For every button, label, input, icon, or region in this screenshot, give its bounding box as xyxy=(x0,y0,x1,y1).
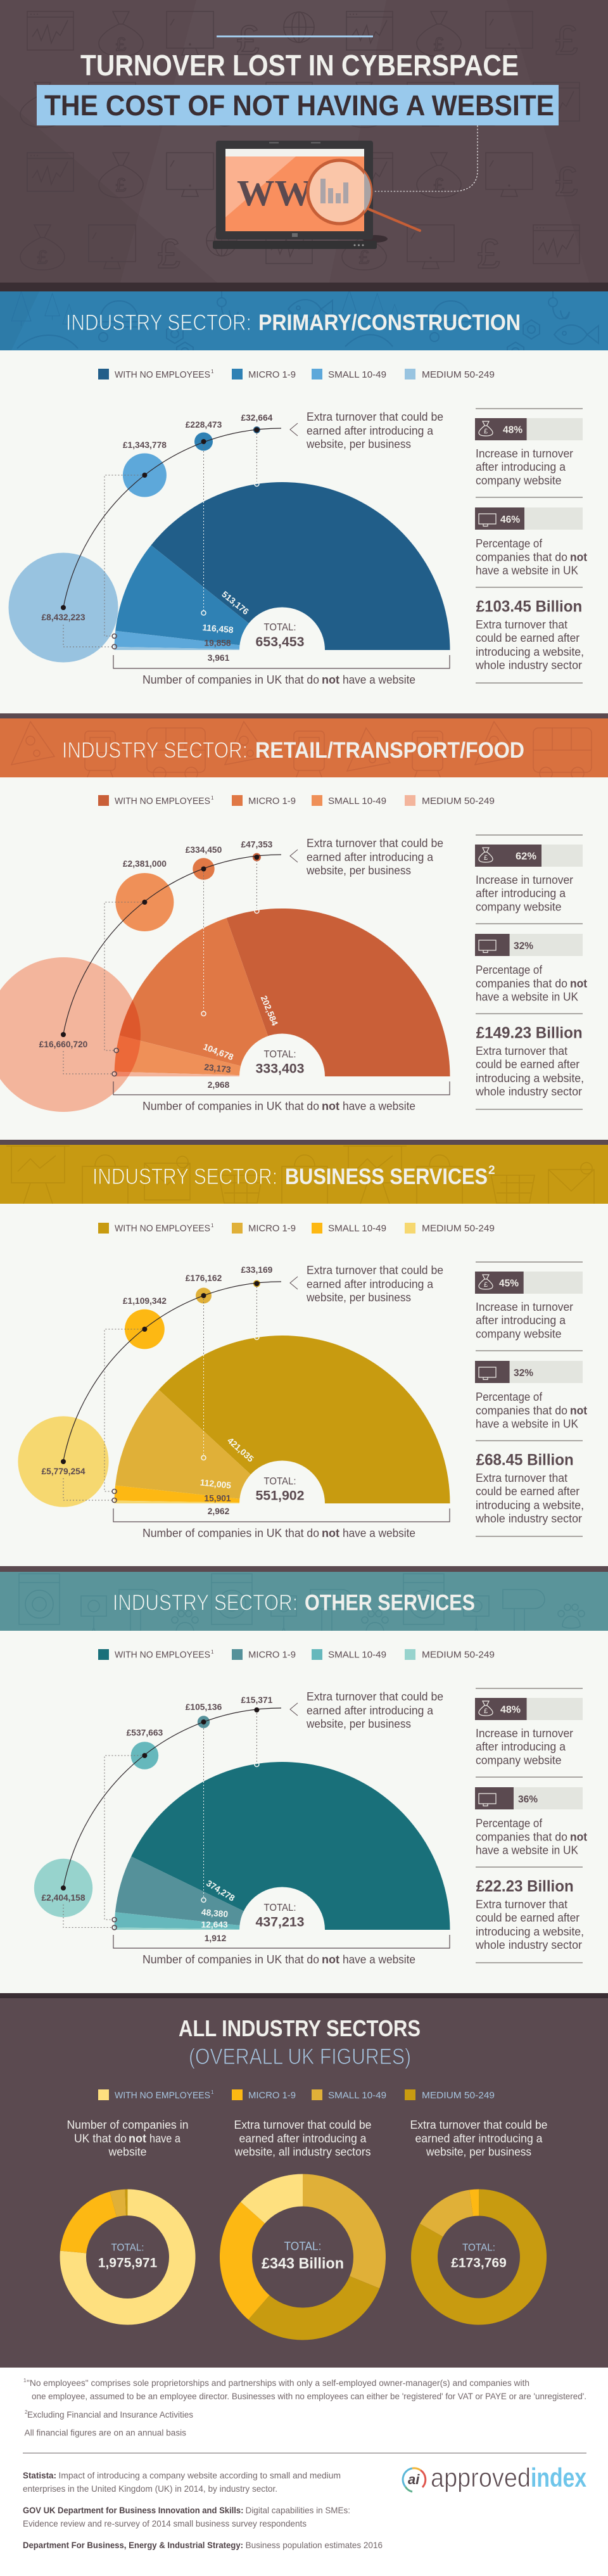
chart: turnover bubbles xyxy=(9,426,281,663)
column caption: companies: have a xyxy=(149,2133,181,2145)
panel: key statistics: Increase in turnover xyxy=(476,447,573,460)
icon: money bag xyxy=(479,1275,493,1289)
bracket and axis caption: Number of companies in UK that do xyxy=(142,1527,319,1540)
callout: extra turnover per business: earned after introducing a xyxy=(307,1704,434,1717)
dashed connector from banner to magnifier xyxy=(372,125,478,191)
logo: approvedindex xyxy=(403,2463,587,2492)
bubble value labels: £5,779,254 xyxy=(41,1467,86,1476)
bubble value labels: £32,664 xyxy=(241,413,273,423)
donut chart: per business turnover: TOTAL: xyxy=(462,2243,495,2253)
sector value labels: 421,035 xyxy=(225,1436,256,1464)
sources: Digital capabilities in SMEs: xyxy=(246,2505,350,2515)
panel: key statistics: £103.45 Billion xyxy=(476,598,582,616)
donut chart: companies xyxy=(60,2190,196,2325)
column caption: all sectors turnover: Extra turnover that could be xyxy=(234,2119,371,2131)
chart total: TOTAL: xyxy=(263,1476,296,1487)
sources: Statista: xyxy=(23,2470,56,2480)
bracket and axis caption: have a website xyxy=(343,1953,415,1966)
panel: key statistics: Increase in turnover xyxy=(476,874,573,886)
icon: money bag: £ xyxy=(484,1707,488,1715)
bubble value labels xyxy=(41,413,273,622)
panel: business services xyxy=(18,1223,587,1540)
hero panel: £ xyxy=(157,230,180,277)
sector value labels: 513,176 xyxy=(220,589,251,616)
panel: key statistics: Percentage of xyxy=(476,1817,543,1830)
chart total xyxy=(256,1476,304,1503)
bubble value labels: £2,381,000 xyxy=(123,859,167,869)
chart total xyxy=(256,1903,305,1930)
chart total: 437,213 xyxy=(256,1915,305,1930)
panel: key statistics: company website xyxy=(476,474,561,487)
bubble value labels: £15,371 xyxy=(241,1695,273,1705)
callout: extra turnover per business: website, per business xyxy=(306,1718,411,1730)
legend: 1 xyxy=(211,369,214,374)
icon: money bag: £ xyxy=(484,428,488,435)
sector value labels: 202,584 xyxy=(259,994,280,1027)
bracket and axis caption: Number of companies in UK that do xyxy=(142,1953,319,1966)
legend: SMALL 10-49 xyxy=(328,796,386,807)
column caption: per business turnover: Extra turnover that could be xyxy=(410,2119,547,2131)
chart: companies semicircle xyxy=(114,1762,450,1930)
panel: key statistics: companies that do xyxy=(476,1831,567,1844)
column caption: companies: Number of companies in xyxy=(67,2119,189,2131)
bubble value labels: £8,432,223 xyxy=(41,613,86,622)
icon: money bag xyxy=(479,1701,493,1716)
sector value labels: 15,901 xyxy=(204,1494,231,1503)
panel: key statistics: companies that do xyxy=(476,1405,567,1417)
chart total: 653,453 xyxy=(256,634,305,649)
callout: extra turnover per business: website, per business xyxy=(306,438,411,450)
sources: Business population estimates 2016 xyxy=(246,2540,383,2550)
title: TURNOVER LOST IN CYBERSPACE xyxy=(80,49,519,82)
callout: extra turnover per business: website, per business xyxy=(306,1291,411,1304)
sector value labels: 12,643 xyxy=(201,1920,228,1930)
panel: key statistics: introducing a website, xyxy=(476,646,584,658)
chart total: TOTAL: xyxy=(263,1903,296,1913)
legend: MICRO 1-9 xyxy=(248,796,296,807)
hero panel xyxy=(0,0,608,291)
panel: key statistics: Extra turnover that xyxy=(476,1045,567,1057)
panel: key statistics: Percentage of xyxy=(476,964,543,976)
column caption: all sectors turnover: website, all industry sectors xyxy=(234,2146,371,2158)
callout: extra turnover per business: earned after introducing a xyxy=(307,1278,434,1291)
panel: key statistics: could be earned after xyxy=(476,1485,580,1498)
bracket and axis caption xyxy=(113,655,450,686)
sector value labels: 1,912 xyxy=(205,1934,227,1943)
bubble value labels: £2,404,158 xyxy=(41,1893,86,1903)
bracket and axis caption xyxy=(113,1935,450,1966)
bubble value labels xyxy=(41,1695,273,1903)
icon: monitor xyxy=(479,514,496,526)
panel: key statistics: not xyxy=(570,551,587,564)
legend: WITH NO EMPLOYEES xyxy=(115,1650,210,1660)
panel: key statistics: not xyxy=(570,1831,587,1844)
sector value labels: 116,458 xyxy=(202,623,234,635)
donut chart: companies: 1,975,971 xyxy=(98,2255,158,2271)
icon: laptop with magnifier xyxy=(213,141,420,249)
sector value labels: 2,962 xyxy=(208,1507,230,1516)
bubble value labels xyxy=(39,840,273,1049)
panel: other services xyxy=(34,1649,587,1966)
column caption: per business turnover: website, per business xyxy=(426,2146,531,2158)
panel: key statistics: after introducing a xyxy=(476,1740,566,1753)
footnotes: Excluding Financial and Insurance Activities xyxy=(27,2409,193,2420)
column caption: all sectors turnover: earned after introducing a xyxy=(239,2133,367,2145)
column caption: companies: not xyxy=(129,2133,146,2145)
panel: key statistics xyxy=(475,409,587,683)
sources: Evidence review and re-survey of 2014 small business survey respondents xyxy=(23,2518,307,2528)
bracket and axis caption xyxy=(113,1081,450,1113)
panel: key statistics: Percentage of xyxy=(476,537,543,550)
donut chart: companies: TOTAL: xyxy=(111,2243,144,2253)
sector value labels xyxy=(202,994,280,1090)
legend: 1 xyxy=(211,1649,214,1655)
panel: key statistics: could be earned after xyxy=(476,1911,580,1924)
section header: retail/transport/food: INDUSTRY SECTOR: xyxy=(62,738,248,763)
panel: key statistics: 32% xyxy=(514,941,533,952)
icon: monitor xyxy=(479,1794,496,1806)
panel: key statistics: introducing a website, xyxy=(476,1072,584,1085)
accent rule above title xyxy=(217,35,373,37)
section header: other services: OTHER SERVICES xyxy=(305,1590,475,1616)
panel: key statistics: Extra turnover that xyxy=(476,1898,567,1911)
hero panel: £ xyxy=(477,87,500,134)
panel: key statistics xyxy=(475,1262,587,1536)
panel: retail/transport/food xyxy=(0,795,587,1113)
column caption: per business turnover xyxy=(410,2119,547,2158)
footnotes: one employee, assumed to be an employee director. Businesses with no employees can either be 'registered' for VAT or PAYE or are 'unregistered'. xyxy=(32,2391,586,2401)
footnotes: 1 xyxy=(23,2378,27,2383)
panel: key statistics: £22.23 Billion xyxy=(476,1878,574,1896)
callout: extra turnover per business: website, per business xyxy=(306,864,411,877)
donut chart: all sectors turnover: £343 Billion xyxy=(262,2255,344,2272)
panel: key statistics: companies that do xyxy=(476,551,567,564)
icon: monitor xyxy=(479,1367,496,1380)
sources xyxy=(23,2470,383,2550)
panel: primary/construction xyxy=(9,369,587,686)
heading: ALL INDUSTRY SECTORS xyxy=(179,2015,421,2041)
subtitle banner: THE COST OF NOT HAVING A WEBSITE xyxy=(44,89,554,122)
section header: retail/transport/food: RETAIL/TRANSPORT/FOOD xyxy=(255,738,524,763)
legend: MICRO 1-9 xyxy=(248,1223,296,1234)
hero panel: £ xyxy=(434,34,445,55)
sector value labels: 48,380 xyxy=(201,1908,229,1919)
callout: extra turnover per business: Extra turnover that could be xyxy=(307,837,443,850)
legend: SMALL 10-49 xyxy=(328,1223,386,1234)
legend: MEDIUM 50-249 xyxy=(422,796,495,807)
chart: companies semicircle xyxy=(114,1336,450,1503)
legend xyxy=(98,369,495,380)
panel: key statistics: after introducing a xyxy=(476,1314,566,1327)
hero panel: £ xyxy=(37,247,48,268)
panel: key statistics: companies that do xyxy=(476,978,567,990)
panel: key statistics: 46% xyxy=(500,514,520,525)
panel: key statistics: 32% xyxy=(514,1368,533,1379)
bubble value labels: £33,169 xyxy=(241,1265,273,1275)
section header: business services: 2 xyxy=(488,1164,495,1177)
sector value labels xyxy=(202,589,251,663)
callout: extra turnover per business: earned after introducing a xyxy=(307,424,434,437)
icon: money bag: £ xyxy=(484,854,488,862)
hero panel: £ xyxy=(434,175,445,196)
bubble value labels: £176,162 xyxy=(186,1273,222,1283)
callout: extra turnover per business xyxy=(290,837,443,877)
bracket and axis caption: not xyxy=(322,1953,339,1966)
section header: business services: BUSINESS SERVICES xyxy=(285,1164,488,1189)
chart total xyxy=(256,622,305,649)
chart: companies semicircle xyxy=(114,909,450,1076)
column caption: per business turnover: earned after introducing a xyxy=(415,2133,543,2145)
callout: extra turnover per business xyxy=(290,411,443,450)
chart: turnover bubbles xyxy=(0,853,281,1112)
panel: key statistics: not xyxy=(570,978,587,990)
section header: other services xyxy=(0,1566,608,1653)
legend: SMALL 10-49 xyxy=(328,1650,386,1660)
legend: MICRO 1-9 xyxy=(248,369,296,380)
bracket and axis caption: Number of companies in UK that do xyxy=(142,1100,319,1113)
section header: primary/construction xyxy=(0,290,608,361)
donut chart: per business turnover xyxy=(411,2189,547,2325)
sector value labels: 104,678 xyxy=(202,1042,235,1062)
legend: MICRO 1-9 xyxy=(248,1650,296,1660)
section header: retail/transport/food xyxy=(0,713,608,793)
sector value labels: 3,961 xyxy=(208,653,230,663)
legend: MEDIUM 50-249 xyxy=(422,2090,495,2101)
legend: MEDIUM 50-249 xyxy=(422,1223,495,1234)
bracket and axis caption xyxy=(113,1508,450,1540)
sources: Impact of introducing a company website according to small and medium xyxy=(58,2470,341,2480)
sector value labels: 19,858 xyxy=(204,639,231,647)
section header: primary/construction: INDUSTRY SECTOR: xyxy=(66,310,251,335)
callout: extra turnover per business: earned after introducing a xyxy=(307,851,434,864)
panel: key statistics: whole industry sector xyxy=(475,1939,582,1951)
panel: key statistics: whole industry sector xyxy=(475,1085,582,1098)
panel: key statistics: not xyxy=(570,1405,587,1417)
hero panel: £ xyxy=(359,247,370,268)
panel: key statistics: Increase in turnover xyxy=(476,1727,573,1740)
panel: key statistics: after introducing a xyxy=(476,887,566,900)
legend: WITH NO EMPLOYEES xyxy=(115,369,210,380)
bubble value labels: £334,450 xyxy=(186,845,222,855)
panel: key statistics: 48% xyxy=(503,424,522,436)
panel: all industry sectors xyxy=(0,1993,608,2368)
bubble value labels: £105,136 xyxy=(186,1702,222,1712)
panel: key statistics: 48% xyxy=(500,1704,521,1716)
legend: SMALL 10-49 xyxy=(328,369,386,380)
bubble value labels: £537,663 xyxy=(127,1728,163,1737)
donut chart: per business turnover: £173,769 xyxy=(451,2255,507,2271)
panel: key statistics: have a website in UK xyxy=(476,991,578,1004)
chart: turnover bubbles xyxy=(18,1280,281,1507)
sector value labels xyxy=(201,1878,237,1943)
legend: MEDIUM 50-249 xyxy=(422,1650,495,1660)
bracket and axis caption: have a website xyxy=(343,1100,415,1113)
panel: key statistics: Percentage of xyxy=(476,1391,543,1403)
bubble value labels: £47,353 xyxy=(241,840,273,849)
sector value labels: 23,173 xyxy=(204,1062,232,1074)
section header: business services: INDUSTRY SECTOR: xyxy=(92,1164,277,1189)
icon: money bag xyxy=(479,848,493,862)
panel: key statistics: have a website in UK xyxy=(476,1418,578,1431)
legend: WITH NO EMPLOYEES xyxy=(115,2090,210,2101)
chart total: TOTAL: xyxy=(263,622,296,633)
chart: turnover bubbles xyxy=(34,1707,281,1930)
panel: key statistics: after introducing a xyxy=(476,461,566,473)
bubble value labels: £228,473 xyxy=(186,420,222,430)
panel: key statistics: whole industry sector xyxy=(475,1512,582,1525)
column caption: companies: UK that do xyxy=(74,2133,127,2145)
panel: key statistics: have a website in UK xyxy=(476,1844,578,1857)
footnotes: 2 xyxy=(25,2409,28,2415)
icon: laptop with magnifier: WW xyxy=(237,172,312,214)
donut chart: all sectors turnover: TOTAL: xyxy=(284,2240,322,2253)
bubble value labels xyxy=(41,1265,273,1476)
panel: key statistics: could be earned after xyxy=(476,1058,580,1071)
legend: 1 xyxy=(211,2089,214,2095)
legend: 1 xyxy=(211,1223,214,1228)
panel: key statistics: 45% xyxy=(499,1278,519,1289)
panel: key statistics: introducing a website, xyxy=(476,1499,584,1512)
legend xyxy=(98,1649,495,1660)
bubble value labels: £1,109,342 xyxy=(123,1296,167,1306)
hero panel: £ xyxy=(158,87,182,134)
hero panel: £ xyxy=(236,16,260,63)
bracket and axis caption: not xyxy=(322,1527,339,1540)
panel: key statistics: could be earned after xyxy=(476,632,580,644)
callout: extra turnover per business: Extra turnover that could be xyxy=(307,411,443,423)
hero panel: £ xyxy=(116,175,127,196)
section header: other services: INDUSTRY SECTOR: xyxy=(113,1590,298,1616)
hero panel: £ xyxy=(477,230,500,277)
section header: primary/construction: PRIMARY/CONSTRUCTION xyxy=(258,310,521,335)
panel: key statistics: whole industry sector xyxy=(475,659,582,672)
legend: 1 xyxy=(211,795,214,801)
sources: Department For Business, Energy & Industrial Strategy: xyxy=(23,2540,243,2550)
panel: key statistics: £149.23 Billion xyxy=(476,1024,583,1042)
sector value labels: 374,278 xyxy=(205,1878,237,1903)
bracket and axis caption: not xyxy=(322,673,339,686)
chart total xyxy=(256,1049,305,1076)
icon: money bag: £ xyxy=(484,1281,488,1289)
icon: monitor xyxy=(479,940,496,953)
chart: companies semicircle xyxy=(114,482,450,650)
panel: key statistics xyxy=(475,835,587,1109)
logo: approvedindex: index xyxy=(531,2463,587,2492)
chart total: 333,403 xyxy=(256,1061,305,1076)
panel: footnotes and sources xyxy=(0,2368,608,2576)
legend: SMALL 10-49 xyxy=(328,2090,386,2101)
callout: extra turnover per business: Extra turnover that could be xyxy=(307,1690,443,1703)
column caption: companies xyxy=(67,2119,189,2158)
panel: key statistics: company website xyxy=(476,1754,561,1766)
legend: WITH NO EMPLOYEES xyxy=(115,796,210,807)
logo: approvedindex: ai xyxy=(408,2471,420,2487)
chart total: 551,902 xyxy=(256,1488,304,1503)
hero panel: £ xyxy=(116,34,127,55)
legend xyxy=(98,2089,495,2101)
panel: key statistics: 36% xyxy=(518,1794,538,1805)
legend: MEDIUM 50-249 xyxy=(422,369,495,380)
panel: key statistics: have a website in UK xyxy=(476,564,578,577)
bubble value labels: £16,660,720 xyxy=(39,1040,88,1049)
legend xyxy=(98,1223,495,1234)
chart total: TOTAL: xyxy=(263,1049,296,1060)
section header: business services xyxy=(0,1140,608,1218)
panel: key statistics: company website xyxy=(476,901,561,914)
sector value labels xyxy=(200,1436,256,1516)
subheading: (OVERALL UK FIGURES) xyxy=(189,2044,411,2069)
callout: extra turnover per business xyxy=(290,1264,443,1304)
column caption: companies: website xyxy=(108,2146,147,2158)
column caption: all sectors turnover xyxy=(234,2119,371,2158)
panel: key statistics: Extra turnover that xyxy=(476,1472,567,1484)
hero panel: £ xyxy=(555,16,578,63)
callout: extra turnover per business xyxy=(290,1690,443,1730)
bracket and axis caption: have a website xyxy=(343,673,415,686)
bracket and axis caption: have a website xyxy=(343,1527,415,1540)
footnotes xyxy=(23,2378,586,2438)
panel: key statistics: £68.45 Billion xyxy=(476,1451,574,1469)
sector value labels: 112,005 xyxy=(200,1477,232,1491)
logo: approvedindex: approved xyxy=(431,2463,531,2492)
panel: key statistics: Extra turnover that xyxy=(476,618,567,631)
callout: extra turnover per business: Extra turnover that could be xyxy=(307,1264,443,1277)
bubble value labels: £1,343,778 xyxy=(123,440,167,450)
panel: key statistics xyxy=(475,1688,587,1963)
hero panel: £ xyxy=(555,158,578,205)
legend: MICRO 1-9 xyxy=(248,2090,296,2101)
sources: enterprises in the United Kingdom (UK) in 2014, by industry sector. xyxy=(23,2484,277,2494)
panel: key statistics: 62% xyxy=(516,851,536,862)
legend: WITH NO EMPLOYEES xyxy=(115,1223,210,1234)
legend xyxy=(98,795,495,807)
donut chart: all sectors turnover xyxy=(220,2174,386,2340)
panel: key statistics: introducing a website, xyxy=(476,1925,584,1938)
panel: key statistics: company website xyxy=(476,1328,561,1341)
panel: key statistics: Increase in turnover xyxy=(476,1301,573,1313)
bracket and axis caption: not xyxy=(322,1100,339,1113)
footnotes: All financial figures are on an annual basis xyxy=(24,2428,186,2438)
sector value labels: 2,968 xyxy=(208,1080,230,1090)
footnotes: "No employees" comprises sole proprietorships and partnerships with only a self-employed owner-manager(s) and companies with xyxy=(27,2378,529,2388)
icon: money bag xyxy=(479,421,493,436)
sources: GOV UK Department for Business Innovation and Skills: xyxy=(23,2505,243,2515)
bracket and axis caption: Number of companies in UK that do xyxy=(142,673,319,686)
